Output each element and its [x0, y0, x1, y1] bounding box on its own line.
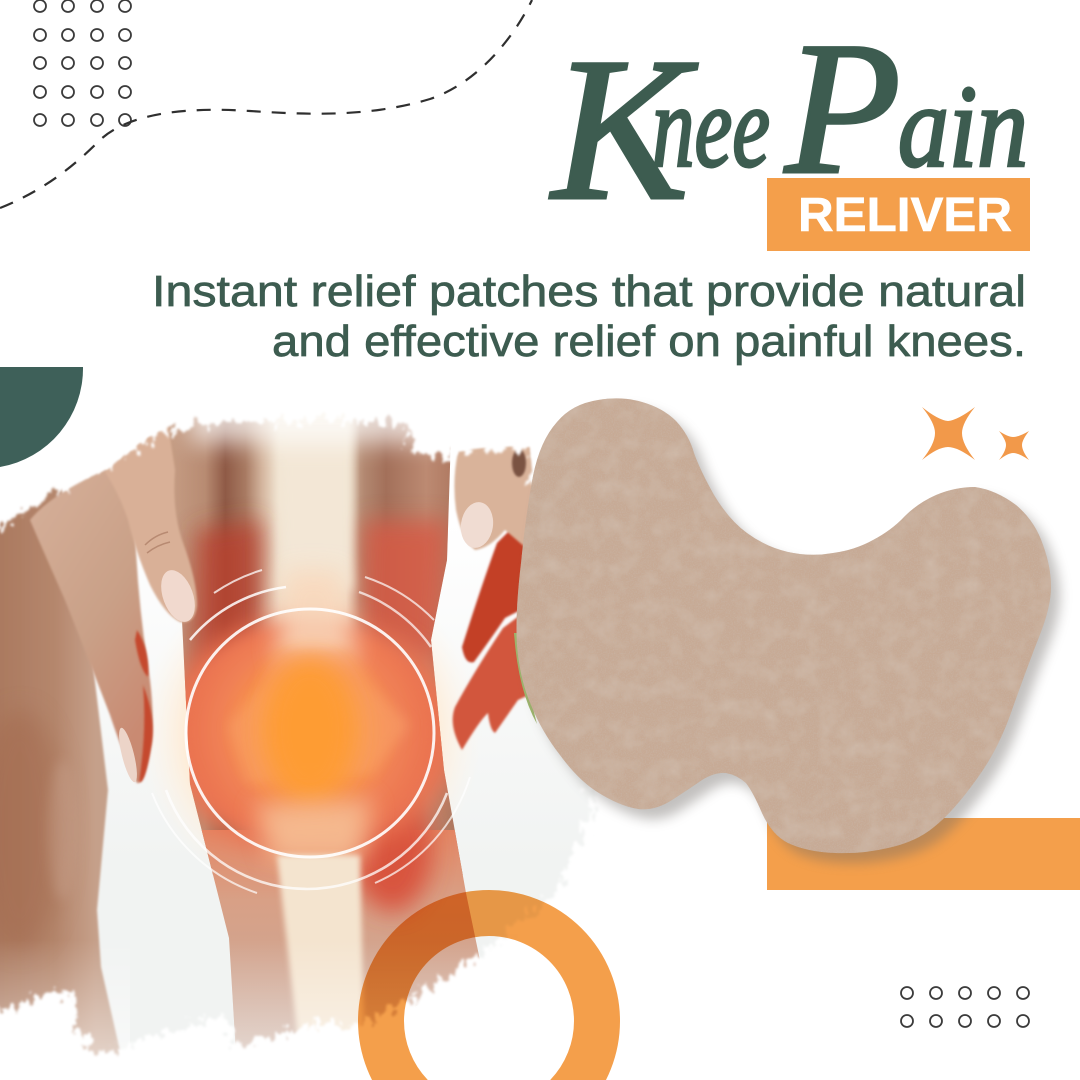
rear leg	[0, 480, 130, 1060]
orange bar behind patch	[767, 818, 1080, 890]
top fade	[177, 412, 440, 460]
stars	[922, 407, 1029, 460]
orange banner: RELIVER: RELIVER	[798, 189, 1012, 242]
knee core	[264, 658, 356, 802]
dashed curve	[0, 0, 532, 208]
red shin glow	[352, 788, 432, 912]
orange ring	[381, 913, 597, 1080]
product patch	[516, 398, 1051, 853]
patch backing: green sliver	[514, 633, 537, 724]
subtitle: Instant relief patches that provide natural	[152, 267, 1026, 316]
right hand	[453, 447, 540, 750]
lower bone	[277, 855, 364, 1040]
photo background	[98, 715, 598, 1044]
main leg	[167, 414, 480, 1049]
central bone upper	[274, 427, 360, 592]
dot grid: bottom right	[901, 987, 1029, 1027]
pale bone fade into knee	[275, 570, 358, 660]
patch shadow	[526, 408, 1060, 863]
pain rings	[152, 570, 470, 893]
lower leg	[202, 830, 480, 1049]
teal quarter circle	[0, 367, 83, 467]
subtitle: and effective relief on painful knees.	[272, 317, 1026, 366]
dark knuckle gap	[512, 449, 526, 477]
title: Knee Pain: P	[783, 4, 901, 214]
femur highlight	[228, 650, 410, 785]
bottom fade	[230, 956, 470, 1050]
nail lower	[119, 728, 137, 782]
knuckle lines	[145, 532, 170, 553]
subtitle	[152, 267, 1026, 366]
title: Knee Pain: K	[549, 16, 698, 243]
orange banner: RELIVER	[767, 178, 1030, 251]
red muscle bands	[190, 520, 262, 720]
knee area	[160, 617, 460, 853]
halo around knee	[158, 639, 460, 837]
nail	[461, 502, 494, 548]
title: Knee Pain: nee	[652, 61, 770, 192]
title: Knee Pain: ain	[898, 61, 1028, 192]
dot grid: top left	[34, 0, 131, 126]
tibia head	[255, 800, 372, 862]
photo: knee with glowing joint	[0, 414, 598, 1056]
title: Knee Pain	[549, 4, 1028, 243]
index finger	[105, 425, 197, 622]
nail	[161, 570, 195, 622]
left hand	[30, 425, 201, 784]
red finger edges	[135, 630, 153, 782]
